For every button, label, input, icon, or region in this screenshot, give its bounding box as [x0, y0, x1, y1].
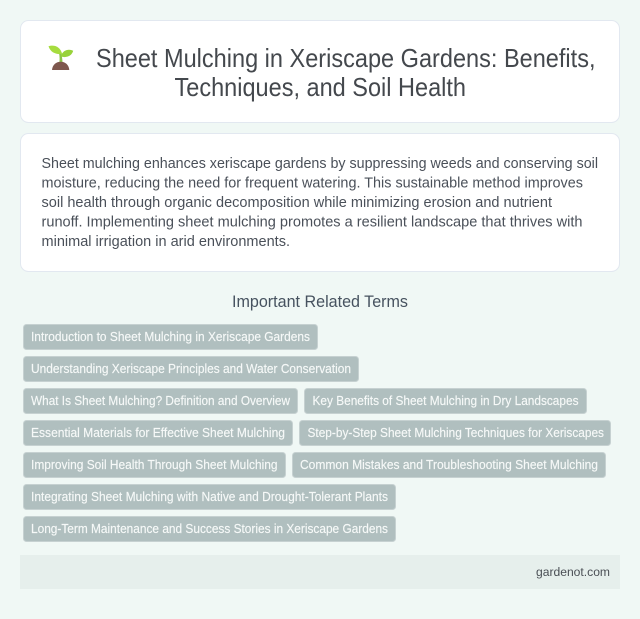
icon: seedling [48, 46, 73, 70]
panel: title card [20, 20, 620, 122]
tag 1 [24, 324, 318, 350]
tag 7 [24, 452, 286, 478]
tag 10 [24, 516, 396, 542]
tag 2: Understanding Xeriscape Principles and Water Conservation [31, 362, 351, 376]
tag 9: Integrating Sheet Mulching with Native and Drought-Tolerant Plants [31, 490, 388, 504]
heading: important related terms: Important Related Terms [232, 293, 408, 311]
summary text: minimal irrigation in arid environments. [42, 234, 290, 250]
title: Techniques, and Soil Health [174, 74, 466, 102]
tag 1: Introduction to Sheet Mulching in Xeriscape Gardens [31, 330, 310, 344]
title [96, 45, 596, 102]
summary text: soil health through organic decomposition while minimizing erosion and nutrient [42, 195, 552, 211]
tag 5: Essential Materials for Effective Sheet Mulching [31, 426, 285, 440]
summary text [42, 156, 598, 250]
summary text: moisture, reducing the need for frequent watering. This sustainable method improves [42, 176, 583, 192]
title: Sheet Mulching in Xeriscape Gardens: Benefits, [96, 45, 596, 73]
tag 7: Improving Soil Health Through Sheet Mulching [31, 458, 278, 472]
tag 5 [24, 420, 292, 446]
panel: summary card [20, 134, 620, 272]
footer source text: gardenot.com [536, 565, 610, 579]
summary text: Sheet mulching enhances xeriscape gardens by suppressing weeds and conserving soil [42, 156, 598, 172]
tag 4: Key Benefits of Sheet Mulching in Dry Landscapes [312, 394, 578, 408]
panel: related term tags [24, 324, 610, 542]
tag 8: Common Mistakes and Troubleshooting Sheet Mulching [300, 458, 598, 472]
tag 2 [24, 356, 358, 382]
tag 9 [24, 484, 396, 510]
tag 4 [304, 388, 586, 414]
tag 10: Long-Term Maintenance and Success Stories in Xeriscape Gardens [31, 522, 388, 536]
tag 3 [24, 388, 298, 414]
tag 6: Step-by-Step Sheet Mulching Techniques for Xeriscapes [308, 426, 604, 440]
footer bar [20, 555, 620, 589]
tag 8 [292, 452, 606, 478]
tag 6 [300, 420, 610, 446]
tag 3: What Is Sheet Mulching? Definition and Overview [31, 394, 291, 408]
summary text: runoff. Implementing sheet mulching promotes a resilient landscape that thrives with [42, 214, 582, 230]
